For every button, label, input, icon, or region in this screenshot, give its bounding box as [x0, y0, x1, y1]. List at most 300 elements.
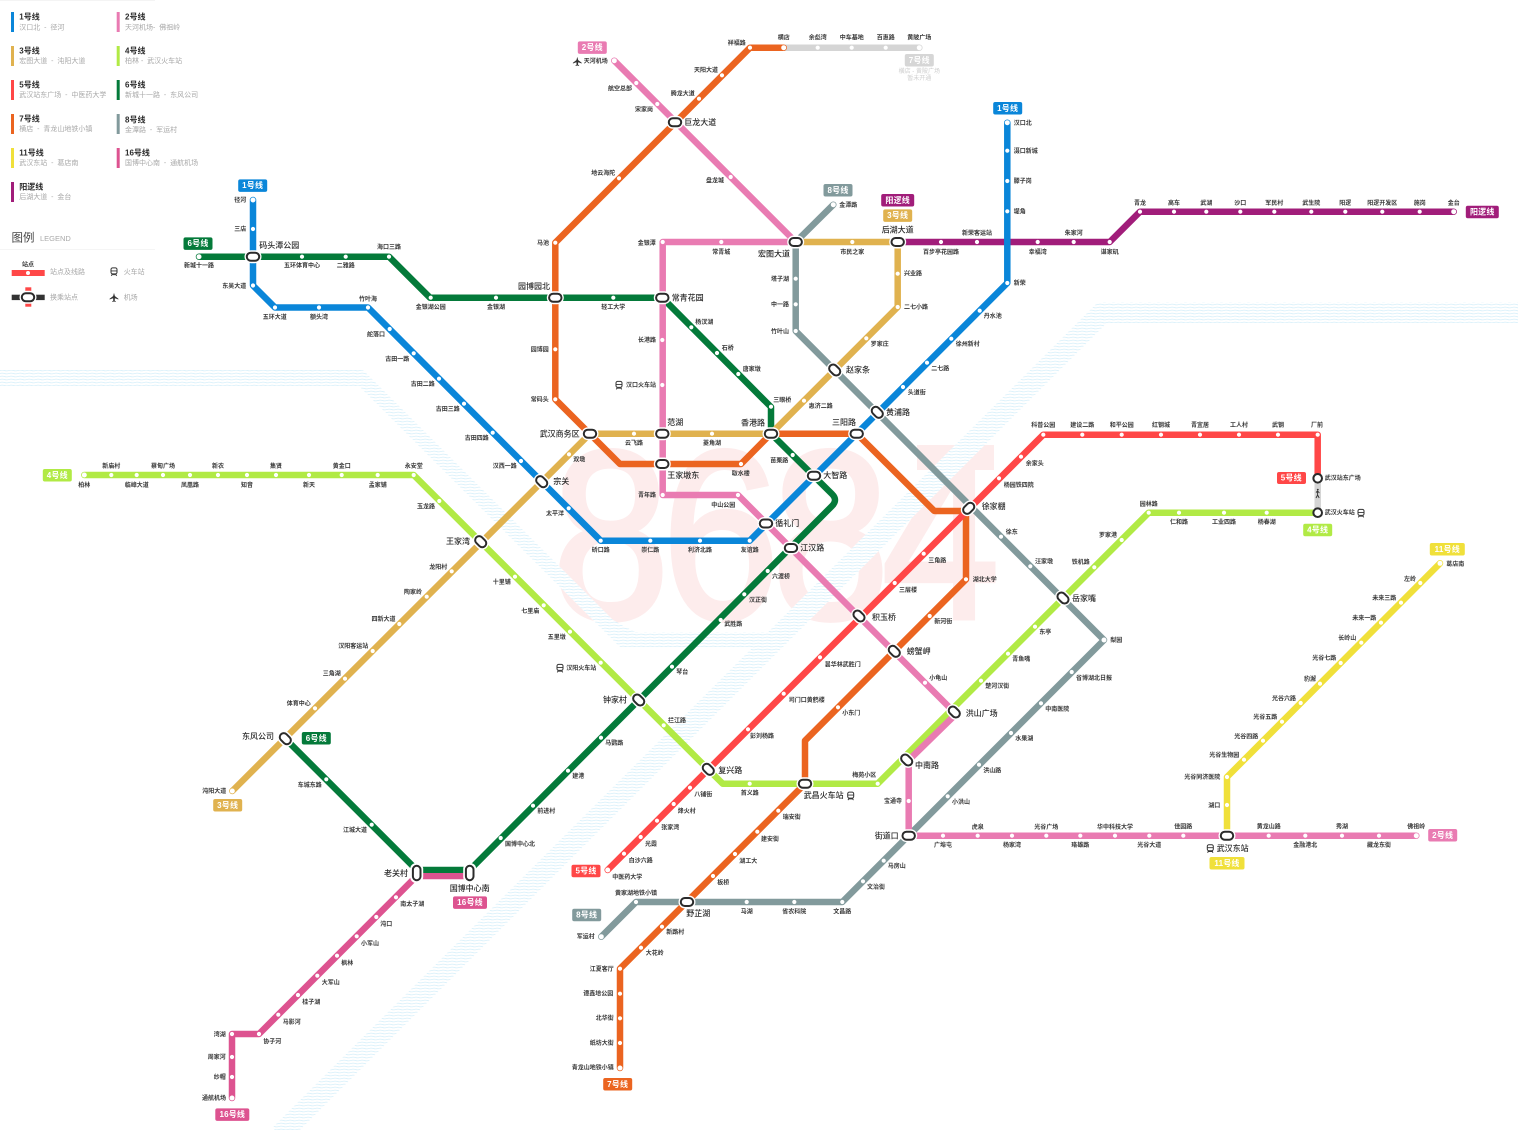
legend: interchange station — [12, 287, 78, 307]
line 16: 通航机场 — [202, 1094, 226, 1102]
line 1: 东吴大道 — [222, 282, 246, 290]
line 7 future extension: 余彪湾 — [809, 34, 827, 42]
line 7: 纸坊大街 — [590, 1039, 614, 1047]
line 6: 武胜路 — [724, 620, 742, 628]
line 5: 和平公园 — [1110, 421, 1134, 429]
tag: line 11 south: 11号线 — [1214, 858, 1240, 868]
line 8: 徐东 — [1006, 528, 1018, 536]
line 4: 青鱼嘴 — [1012, 655, 1030, 663]
line 1: 古田四路 — [465, 434, 489, 442]
interchange: Wuhan railway station — [1313, 508, 1322, 517]
tag: line 8 south — [572, 909, 601, 921]
line 6 — [184, 243, 835, 870]
line 2: 藏龙东街 — [1367, 841, 1391, 849]
line 4: 杨春湖 — [1258, 518, 1276, 526]
line 5: 光霞 — [645, 840, 657, 848]
line 7: 青龙山地铁小镇 — [572, 1063, 614, 1071]
Yangluo line: 武生院 — [1302, 199, 1320, 207]
line 2: 广埠屯 — [934, 841, 952, 849]
line 4: 武汉火车站 — [1325, 509, 1355, 517]
line 5: 中医药大学 — [612, 873, 642, 881]
interchange: 徐家棚 — [958, 498, 1006, 519]
line 11: 光谷四路 — [1234, 733, 1258, 741]
line 4: 首义路 — [741, 789, 759, 797]
interchange: 东风公司: 东风公司 — [242, 731, 274, 741]
icon: Hankou railway station — [616, 381, 622, 389]
interchange: 园博园北 — [518, 281, 564, 304]
line 1: 堤角 — [1014, 207, 1026, 215]
line 16: 枫林 — [341, 959, 353, 967]
line 7: 马池 — [537, 239, 549, 247]
line 1: 丹水池 — [984, 312, 1002, 320]
Yangluo line: 金台 — [1448, 199, 1460, 207]
interchange: Wuhan station east square — [1313, 474, 1322, 483]
walking transfer between Wuhan station east square and Wuhan railway station — [1313, 474, 1322, 517]
line 5: 杨园铁四院 — [1004, 481, 1034, 489]
legend: station and line: 站点及线路 — [50, 267, 85, 276]
line 4: 铁机路 — [1072, 558, 1090, 566]
tag: line 3 north: 3号线 — [887, 210, 908, 220]
line 4: 楚河汉街 — [985, 682, 1009, 690]
tag: line 6 west: 6号线 — [187, 238, 209, 248]
line 8: 文治街 — [867, 883, 885, 891]
tag: line 7 south — [603, 1078, 632, 1090]
line 1: 友谊路 — [741, 546, 759, 554]
line 11: 葛店南 — [1446, 560, 1464, 568]
line 4: 永安堂 — [405, 462, 423, 470]
legend entry: Yangluo line — [11, 182, 71, 202]
line 11 — [1184, 560, 1464, 836]
line 2: 杨家湾 — [1003, 841, 1021, 849]
legend heading: LEGEND — [40, 234, 71, 243]
line 7 future extension: 中车基地 — [840, 34, 864, 42]
interchange: 江汉路: 江汉路 — [800, 542, 824, 552]
interchange: 王家湾 — [446, 531, 491, 552]
line 2: 佳园路 — [1174, 823, 1192, 831]
line 1: 汉西一路 — [493, 462, 517, 470]
line 3: 汉阳客运站 — [338, 642, 368, 650]
tag: line 5 east — [1277, 472, 1306, 484]
line 8: 中一路 — [771, 301, 789, 309]
Yangluo line: 百步亭花园路 — [923, 248, 959, 256]
interchange: 黄浦路 — [867, 402, 910, 423]
tag: line 3 south — [213, 799, 242, 812]
interchange: 螃蟹岬 — [884, 641, 931, 662]
interchange: 赵家条 — [824, 359, 870, 381]
line 1: 滕子岗 — [1014, 177, 1032, 185]
tag: line 3 north — [883, 209, 912, 222]
line 1: 太平洋 — [546, 510, 564, 518]
line 11: 长岭山 — [1338, 634, 1356, 642]
Yangluo line: 武湖 — [1200, 199, 1212, 207]
interchange: 宏图大道 — [758, 236, 804, 258]
tag: line 4 east — [1303, 524, 1332, 536]
line 3: 菱角湖 — [703, 439, 721, 447]
Yangluo line: 沙口 — [1234, 200, 1246, 207]
tag: line 11 south — [1210, 857, 1244, 870]
line 6: 三眼桥 — [773, 396, 791, 404]
tag: line 1 north — [993, 102, 1022, 114]
line 7 future extension — [778, 34, 940, 82]
line 6: 金银湖 — [487, 303, 505, 311]
line 1: 竹叶海 — [359, 295, 377, 303]
line 7: 新河街 — [934, 618, 952, 626]
legend entry: line 6: 新城十一路 - 东风公司 — [125, 90, 198, 99]
line 8: 小洪山 — [952, 798, 970, 806]
line 1: 汉口北 — [1014, 119, 1032, 127]
legend entry: line 1 — [11, 12, 64, 32]
tag: line 2 east — [1428, 829, 1457, 842]
line 3: 体育中心 — [287, 700, 311, 708]
interchange: 三阳路: 三阳路 — [832, 417, 856, 427]
line 2: 光谷广场 — [1034, 823, 1058, 831]
line 3 — [202, 242, 928, 795]
line 5: 厂前 — [1311, 421, 1323, 429]
interchange: 积玉桥 — [848, 605, 896, 627]
line 3: 云飞路 — [625, 439, 643, 447]
line 7: 北华街 — [596, 1014, 614, 1022]
icon: Wuhan railway station — [1358, 509, 1364, 517]
legend: railway station icon — [111, 267, 145, 276]
interchange: 中南路: 中南路 — [915, 760, 939, 770]
line 5: 白沙六路 — [629, 857, 653, 865]
line 3: 沌阳大道 — [202, 787, 226, 795]
line 7 future extension: 百惠路 — [877, 34, 895, 42]
note: not yet open: 暂未开通 — [907, 74, 931, 82]
Yangluo line: 幸福湾 — [1029, 248, 1047, 256]
line 4: 仁和路 — [1170, 518, 1188, 526]
line 2: 航空总部 — [608, 84, 632, 92]
line 1: 五环大道 — [263, 313, 287, 321]
legend entry: line 4: 4号线 — [125, 46, 145, 56]
interchange: 积玉桥: 积玉桥 — [872, 612, 896, 622]
line 6: 马鹦路 — [605, 739, 623, 747]
interchange: 王家湾: 王家湾 — [446, 536, 470, 546]
line 1: 头道街 — [908, 389, 926, 397]
line 3: 双墩 — [573, 456, 585, 464]
line 2: 常青城 — [712, 248, 730, 256]
line 5: 烽火村 — [678, 807, 696, 815]
tag: line 5 east: 5号线 — [1281, 472, 1302, 482]
interchange: 宏图大道: 宏图大道 — [758, 248, 790, 258]
line 4: 七里庙 — [521, 607, 539, 615]
tag: line 16 north: 16号线 — [457, 897, 483, 907]
interchange: 赵家条: 赵家条 — [846, 364, 870, 374]
interchange: 钟家村 — [603, 689, 649, 711]
line 6: 金银湖公园 — [416, 303, 446, 311]
tag: line 16 north — [453, 896, 487, 909]
line 16: 南太子湖 — [400, 900, 424, 908]
line 3: 三角湖 — [323, 670, 341, 678]
tag: line 8 north: 8号线 — [827, 185, 849, 195]
line 4 — [78, 462, 1364, 797]
interchange: 武汉商务区 — [540, 427, 598, 440]
interchange: 江汉路 — [782, 542, 824, 554]
line 2: 佛祖岭 — [1407, 823, 1425, 831]
Yangluo line: 谌家矶 — [1101, 248, 1119, 256]
interchange: 后湖大道: 后湖大道 — [882, 224, 914, 234]
legend: railway station icon: 火车站 — [124, 267, 145, 276]
line 11: 未来一路 — [1352, 614, 1376, 622]
tag: Yangluo line west: 阳逻线 — [885, 195, 910, 205]
legend entry: line 3 — [11, 46, 85, 66]
interchange: 复兴路 — [698, 759, 742, 780]
legend entry: Yangluo line: 阳逻线 — [19, 182, 43, 192]
legend entry: line 3: 3号线 — [19, 46, 40, 56]
line 5 — [608, 421, 1361, 881]
interchange: 三阳路 — [832, 417, 865, 440]
line 6: 五环体育中心 — [284, 262, 320, 270]
interchange: 岳家嘴 — [1052, 587, 1096, 609]
interchange: 香港路 — [741, 418, 780, 440]
line 1: 利济北路 — [688, 546, 712, 554]
tag: Yangluo line west — [881, 194, 914, 206]
line 8: 黄家湖地铁小镇 — [615, 889, 657, 897]
interchange: 循礼门 — [758, 517, 799, 530]
legend: airport icon — [110, 292, 138, 302]
line 4: 汉阳火车站 — [566, 664, 596, 672]
line 2: 虎泉 — [972, 823, 984, 831]
Yangluo line — [898, 199, 1460, 256]
line 4: 临嶂大道 — [125, 481, 149, 489]
tag: line 6 south: 6号线 — [306, 733, 327, 743]
interchange: 码头潭公园 — [244, 240, 299, 263]
line 5: 建设二路 — [1070, 421, 1094, 429]
line 11: 光谷五路 — [1253, 713, 1277, 721]
line 4: 园林路 — [1140, 500, 1158, 508]
legend panel: line list — [0, 0, 198, 202]
legend entry: line 11: 11号线 — [19, 148, 44, 158]
line 1 — [222, 119, 1038, 554]
interchange: 中南路 — [896, 749, 939, 771]
line 8: 中南医院 — [1045, 705, 1069, 713]
interchange: 宗关: 宗关 — [553, 476, 569, 486]
interchange: 大智路 — [806, 469, 847, 482]
line 1: 古田二路 — [411, 380, 435, 388]
line 2: 黄龙山路 — [1257, 823, 1281, 831]
line 2 — [573, 57, 1425, 849]
interchange: 野芷湖 — [678, 896, 710, 918]
line 8: 省博湖北日报 — [1076, 674, 1112, 682]
line 7 future extension: 横店 — [778, 34, 790, 42]
line 5: 武钢 — [1272, 421, 1284, 429]
Yangluo line: 新荣客运站 — [962, 229, 992, 237]
Yangluo line: 阳逻 — [1339, 199, 1351, 207]
line 4: 拦江路 — [668, 717, 686, 725]
line 7: 天阳大道 — [694, 66, 718, 74]
line 5: 三层楼 — [899, 586, 917, 594]
tag: line 11 north: 11号线 — [1435, 544, 1460, 554]
line 16: 小军山 — [361, 940, 379, 948]
line 1: 径河 — [234, 196, 246, 204]
legend entry: line 6: 6号线 — [125, 80, 145, 90]
legend entry: line 4 — [117, 46, 182, 66]
legend entry: line 1: 汉口北 - 径河 — [19, 22, 64, 31]
interchange: 后湖大道 — [882, 224, 914, 248]
line 2: 盘龙城 — [706, 176, 724, 184]
interchange: 街道口 — [875, 829, 917, 842]
line 3: 罗家庄 — [871, 340, 889, 348]
line 7 future extension: 黄陂广场 — [907, 34, 931, 42]
line 5: 科普公园 — [1031, 421, 1055, 429]
line 8: 水果湖 — [1015, 735, 1033, 743]
line 1: 二七路 — [931, 365, 949, 373]
tag: line 2 north — [578, 41, 607, 54]
line 7: 取水楼 — [732, 470, 750, 478]
tag: line 7 future: 7号线 — [909, 55, 930, 65]
interchange: 岳家嘴: 岳家嘴 — [1072, 593, 1096, 603]
line 4: 五里墩 — [548, 633, 566, 641]
legend entry: line 6 — [117, 80, 198, 100]
line 11: 左岭 — [1404, 575, 1416, 583]
line 6: 汉正街 — [749, 596, 767, 604]
line 6: 六渡桥 — [772, 573, 790, 581]
tag: line 16 south: 16号线 — [219, 1109, 245, 1119]
interchange: 东风公司 — [242, 728, 296, 749]
line 6: 国博中心北 — [505, 840, 535, 848]
line 11: 光谷生物园 — [1209, 751, 1239, 759]
line 1: 古田三路 — [436, 405, 460, 413]
legend entry: line 16: 国博中心南 - 通航机场 — [125, 158, 198, 167]
line 2: 光谷大道 — [1137, 841, 1161, 849]
line 7: 小东门 — [842, 709, 860, 717]
line 7: 园博园 — [531, 346, 549, 354]
line 2: 金融港北 — [1293, 841, 1317, 849]
interchange: 武昌火车站 — [796, 777, 854, 800]
tag: line 8 north — [824, 184, 852, 196]
legend entry: line 5: 5号线 — [19, 80, 40, 90]
line 5: 工人村 — [1230, 421, 1248, 429]
legend entry: line 8 — [117, 114, 177, 134]
line 5: 红钢城 — [1152, 421, 1170, 429]
legend entry: line 2: 天河机场- 佛祖岭 — [125, 22, 180, 31]
line 7: 建安街 — [761, 835, 779, 843]
line 11: 光谷同济医院 — [1184, 773, 1220, 781]
line 16: 沌口 — [380, 920, 392, 928]
line 1: 滠口新城 — [1014, 147, 1038, 155]
line 16: 协子河 — [263, 1037, 281, 1045]
line 6: 海口三路 — [377, 243, 401, 251]
tag: line 6 west — [184, 237, 212, 250]
line 7: 湖工大 — [739, 857, 757, 865]
line 1: 舵落口 — [367, 331, 385, 339]
note: not yet open — [899, 67, 940, 82]
line 2: 秀湖 — [1336, 823, 1348, 831]
line 16: 周家河 — [208, 1053, 226, 1061]
legend entry: line 5 — [11, 80, 106, 100]
interchange: 范湖 — [654, 417, 683, 440]
legend entry: line 7: 7号线 — [19, 114, 40, 124]
line 4: 新天 — [303, 481, 315, 489]
legend entry: line 11: 武汉东站 - 葛店南 — [19, 158, 78, 167]
interchange: 徐家棚: 徐家棚 — [982, 501, 1006, 511]
Guobo centre shared segment — [419, 867, 469, 879]
tag: line 7 future — [905, 54, 934, 66]
line 7: 祥福路 — [728, 39, 746, 47]
interchange: 王家墩东 — [654, 458, 699, 480]
legend heading — [12, 230, 71, 244]
tag: line 4 west: 4号线 — [47, 470, 68, 480]
interchange: 武汉东站: 武汉东站 — [1217, 843, 1249, 853]
interchange: 大智路: 大智路 — [823, 470, 847, 480]
tag: line 16 south — [215, 1108, 249, 1121]
tag: line 4 east: 4号线 — [1307, 524, 1328, 534]
line 11: 未来三路 — [1372, 594, 1396, 602]
legend entry: line 8: 金潭路 - 军运村 — [125, 125, 177, 134]
line 3: 二七小路 — [904, 303, 928, 311]
interchange: 武汉商务区: 武汉商务区 — [540, 428, 580, 438]
line 4: 知音 — [241, 481, 253, 489]
line 16: 桂子湖 — [302, 998, 320, 1006]
legend entry: line 16: 16号线 — [125, 148, 150, 158]
line 2: 珞雄路 — [1071, 841, 1089, 849]
line 1: 新荣 — [1014, 279, 1026, 287]
tag: line 1 west — [238, 179, 267, 192]
legend: station and line — [12, 261, 85, 276]
line 7: 江夏客厅 — [590, 965, 614, 973]
line 3: 市民之家 — [840, 248, 864, 256]
line 16: 马影河 — [283, 1018, 301, 1026]
legend entry: line 11 — [11, 148, 78, 168]
legend panel: symbols — [0, 230, 155, 307]
legend entry: line 7: 横店 - 青龙山地铁小镇 — [19, 124, 92, 133]
line 7: 常码头 — [531, 396, 549, 404]
line 16: 大军山 — [322, 979, 340, 987]
interchange: 国博中心南: 国博中心南 — [450, 883, 490, 893]
line 11: 湖口 — [1208, 802, 1220, 810]
legend entry: line 2 — [117, 12, 180, 32]
line 2: 华中科技大学 — [1097, 823, 1133, 831]
line 1: 徐州新村 — [956, 340, 980, 348]
interchange: 钟家村: 钟家村 — [603, 694, 627, 704]
line 6: 车城东路 — [298, 781, 322, 789]
legend entry: Yangluo line: 后湖大道 - 金台 — [19, 192, 71, 201]
tag: line 3 south: 3号线 — [217, 800, 238, 810]
line 8: 洪山路 — [983, 767, 1001, 775]
interchange: 香港路: 香港路 — [741, 418, 765, 428]
line 6: 杨汊湖 — [695, 318, 713, 326]
line 7: 板桥 — [717, 879, 729, 887]
line 2: 宝通寺 — [884, 797, 902, 805]
Yangluo line: 青龙 — [1134, 199, 1146, 207]
line 2: 长港路 — [638, 336, 656, 344]
legend entry: line 8: 8号线 — [125, 114, 145, 124]
line 8: 马房山 — [888, 862, 906, 870]
line 6: 轻工大学 — [601, 303, 625, 311]
interchange: 野芷湖: 野芷湖 — [686, 908, 710, 918]
legend heading: 图例 — [12, 230, 34, 244]
interchange: 宗关 — [531, 471, 569, 492]
line 7: 大花岭 — [646, 949, 664, 957]
tag: Yangluo line east: 阳逻线 — [1470, 206, 1495, 216]
river bands — [0, 312, 1518, 1130]
line 1: 三店 — [234, 225, 246, 233]
line 3: 惠济二路 — [809, 402, 833, 410]
line 8: 军运村 — [577, 933, 595, 941]
legend: station and line: 站点 — [22, 261, 34, 269]
interchange: 园博园北: 园博园北 — [518, 281, 550, 291]
line 7: 新路村 — [666, 928, 684, 936]
line 6: 琴台 — [676, 668, 688, 676]
interchange: 循礼门: 循礼门 — [775, 518, 799, 528]
line 2: 青年路 — [638, 491, 656, 499]
line 6: 建港 — [572, 772, 584, 780]
line 2: 中山公园 — [711, 501, 735, 509]
line 1: 额头湾 — [310, 313, 328, 321]
line 4: 罗家港 — [1099, 531, 1117, 539]
line 3: 陶家岭 — [404, 588, 422, 596]
legend entry: line 16 — [117, 148, 198, 168]
